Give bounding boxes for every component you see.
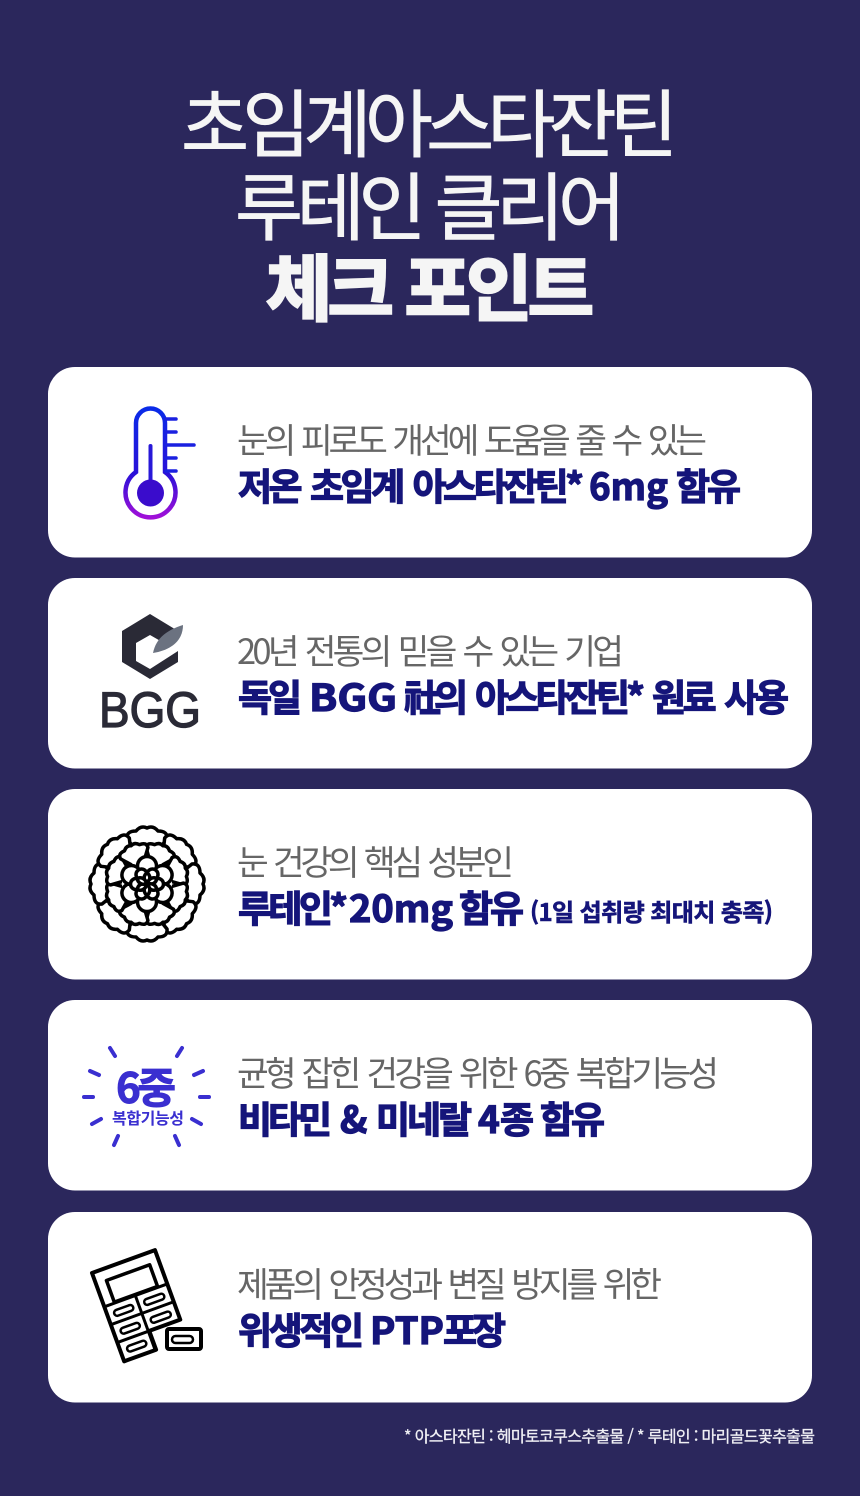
text: card 3: 20mg	[349, 879, 453, 933]
icon: marigold flower	[90, 827, 204, 941]
icon: 6 complex badge: 6중	[116, 1055, 176, 1116]
text: card 2: 원료 사용	[652, 668, 789, 722]
text: card 4: 미네랄	[376, 1090, 472, 1144]
text: card 4: &	[340, 1090, 367, 1144]
panel: card 2	[48, 578, 812, 768]
text: card 4: 4종	[478, 1090, 534, 1144]
text: card 5: 위생적인	[238, 1301, 364, 1355]
icon: 6 complex badge	[84, 1048, 209, 1145]
panel: card 3	[48, 789, 812, 980]
footnote: * 아스타잔틴 : 헤마토코쿠스추출물 / * 루테인 : 마리골드꽃추출물	[404, 1423, 815, 1447]
text: card 5: PTP	[370, 1301, 444, 1355]
text: card 4: 비타민	[238, 1090, 332, 1144]
title	[181, 66, 678, 336]
text: card 4	[237, 1046, 719, 1144]
text: card 2: 아스타잔틴*	[475, 668, 645, 722]
text: card 4: 함유	[540, 1090, 605, 1144]
text: card 5	[237, 1257, 662, 1355]
text: card 1	[237, 413, 741, 511]
text: card 4: 균형 잡힌 건강을 위한 6중 복합기능성	[237, 1046, 719, 1096]
panel: card 1	[48, 367, 812, 558]
text: card 2: 독일	[238, 668, 302, 722]
icon: thermometer	[126, 408, 194, 517]
title: 초임계아스타잔틴	[181, 66, 678, 173]
icon: BGG logo: BGG	[99, 682, 201, 738]
text: card 1: 눈의 피로도 개선에 도움을 줄 수 있는	[237, 413, 707, 463]
text: card 3: 함유	[459, 879, 524, 933]
text: card 3: (1일 섭취량 최대치 충족)	[530, 893, 773, 928]
icon: 6 complex badge: 복합기능성	[112, 1105, 184, 1129]
text: card 5: 제품의 안정성과 변질 방지를 위한	[237, 1257, 662, 1307]
text: card 2: 社의	[404, 668, 468, 722]
text: card 2: BGG	[309, 668, 397, 722]
title: 체크 포인트	[266, 231, 594, 336]
text: card 1: 저온 초임계 아스타잔틴*	[238, 457, 584, 511]
panel: card 5	[48, 1212, 812, 1402]
text: card 3: 눈 건강의 핵심 성분인	[237, 835, 514, 885]
text: card 3	[237, 835, 773, 933]
text: card 5: 포장	[443, 1301, 506, 1355]
icon: PTP blister pack	[92, 1250, 201, 1361]
text: card 2	[237, 624, 789, 722]
text: card 2: 20년 전통의 믿을 수 있는 기업	[237, 624, 624, 674]
panel: card 4	[48, 1000, 812, 1190]
text: card 1: 6mg	[589, 457, 668, 511]
text: card 3: 루테인*	[238, 879, 348, 933]
text: card 1: 함유	[676, 457, 741, 511]
icon: BGG logo	[99, 614, 201, 738]
title: 루테인 클리어	[235, 149, 626, 256]
